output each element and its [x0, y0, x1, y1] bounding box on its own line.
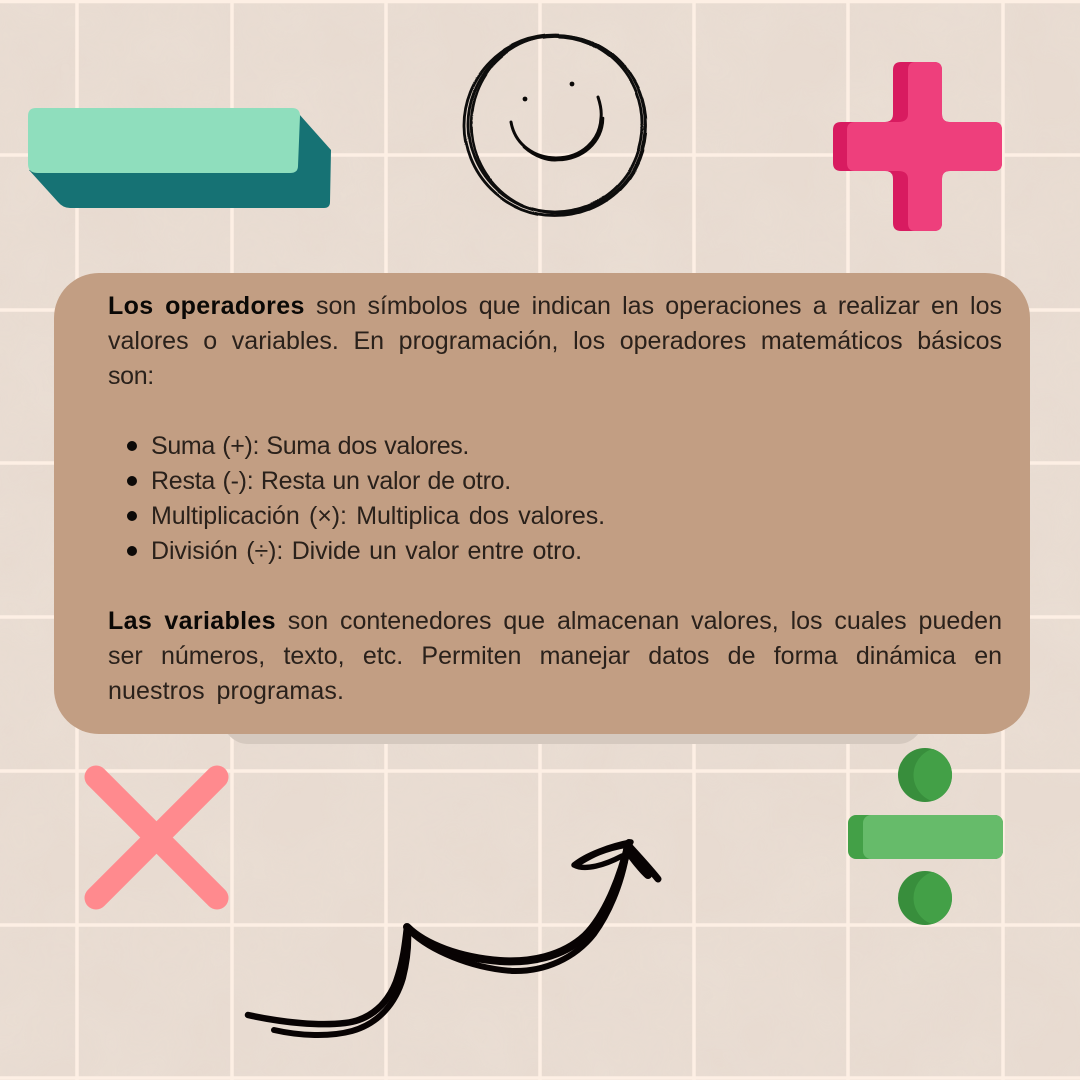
shadow under text panel — [223, 700, 923, 744]
icon: division sign — [848, 748, 1003, 925]
text block: variables definition: ser números, texto, etc. Permiten manejar datos de forma dinámica en — [108, 642, 1002, 670]
list: basic math operators: Multiplicación (×): Multiplica dos valores. — [151, 502, 605, 530]
text block: variables definition: nuestros programas. — [108, 677, 344, 705]
list: basic math operators: Resta (-): Resta un valor de otro. — [151, 467, 511, 495]
panel: text card — [54, 273, 1030, 734]
text block: operators definition: Los operadores son símbolos que indican las operaciones a realizar en los — [108, 292, 1002, 320]
text block: variables definition: Las variables son contenedores que almacenan valores, los cuales pueden — [108, 607, 1002, 635]
list: basic math operators: División (÷): Divide un valor entre otro. — [151, 537, 582, 565]
text block: operators definition: valores o variables. En programación, los operadores matemáticos básicos — [108, 327, 1002, 355]
list: basic math operators: Suma (+): Suma dos valores. — [151, 432, 469, 460]
text block: operators definition: son: — [108, 362, 154, 390]
